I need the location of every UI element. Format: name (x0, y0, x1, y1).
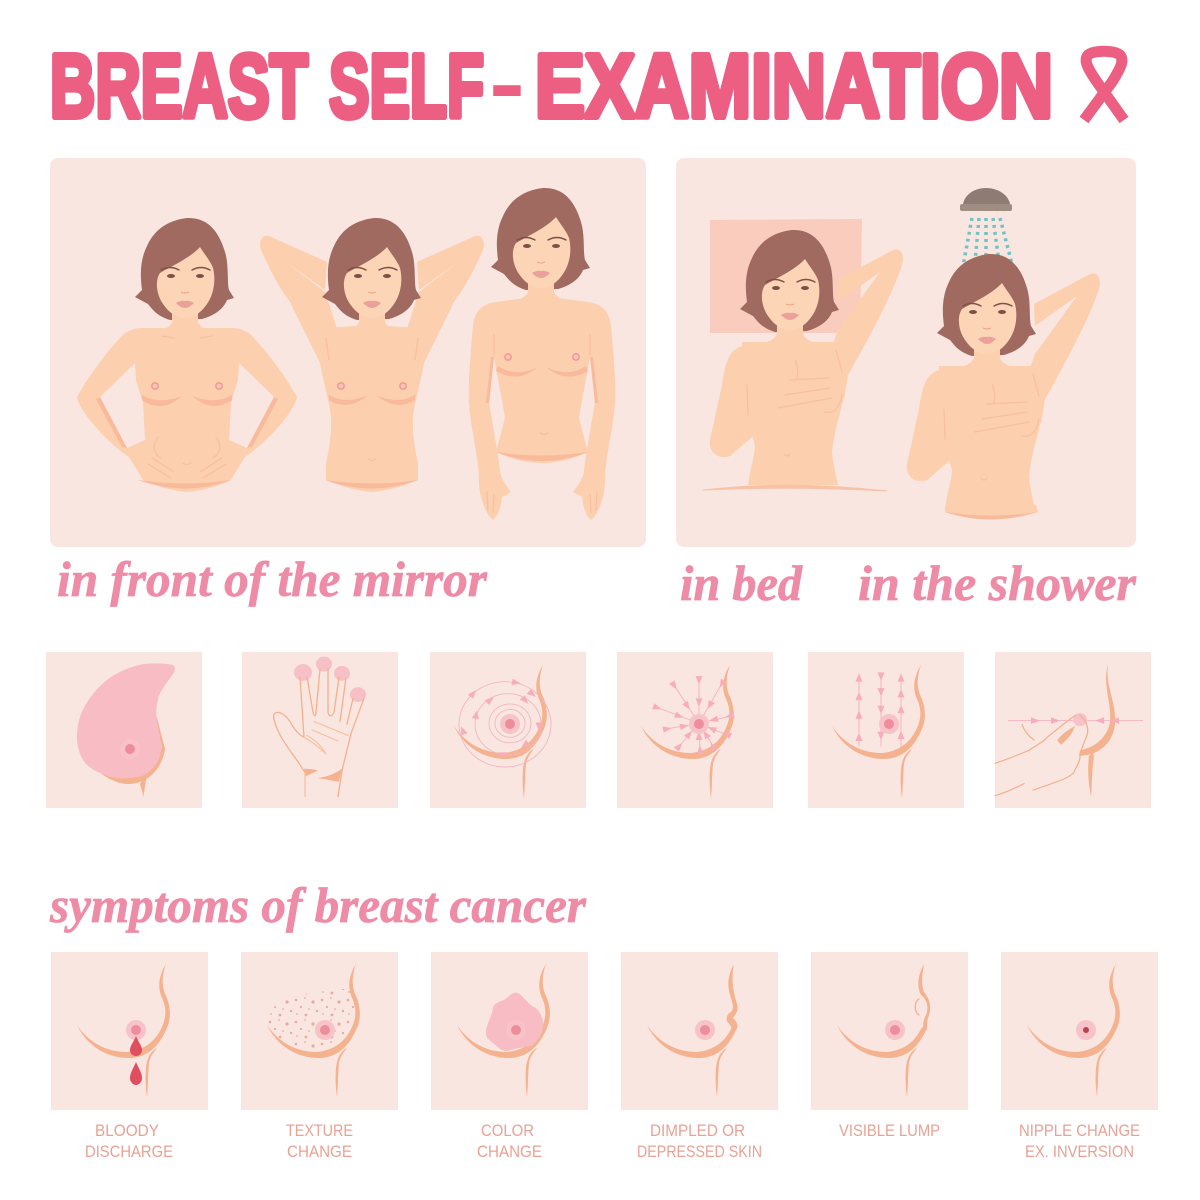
label: dimpled or depressed skin: DEPRESSED SKIN (637, 1142, 762, 1161)
label: bloody discharge: DISCHARGE (85, 1142, 173, 1161)
label: texture change: TEXTURE (286, 1121, 353, 1140)
label: nipple change ex. inversion: EX. INVERSION (1025, 1142, 1134, 1161)
label: color change (477, 1121, 542, 1161)
heading: in bed: in bed (680, 555, 803, 611)
symptom: nipple inversion (1001, 952, 1158, 1110)
figure: hands on hips (77, 218, 297, 492)
label: nipple change ex. inversion (1019, 1121, 1140, 1161)
figure: in bed (710, 230, 903, 485)
figure: arms raised behind head (260, 218, 484, 492)
panel: in front of the mirror (50, 158, 646, 547)
step: circular pattern (430, 652, 586, 808)
panel: in bed and in the shower (676, 158, 1136, 547)
figure: in the shower (907, 254, 1100, 520)
label: visible lump: VISIBLE LUMP (839, 1121, 940, 1140)
heading: symptoms of breast cancer: symptoms of breast cancer (49, 877, 587, 933)
label: dimpled or depressed skin (637, 1121, 762, 1161)
label: color change: COLOR (481, 1121, 534, 1140)
title: SELF (329, 37, 484, 137)
title (50, 34, 1053, 137)
symptom: texture change (241, 952, 398, 1110)
symptom: color change (431, 952, 588, 1110)
label: bloody discharge: BLOODY (95, 1121, 159, 1140)
bed line (703, 485, 887, 491)
step: radial pattern (617, 652, 773, 808)
step: breast area to examine (46, 652, 202, 808)
symptom: visible lump (811, 952, 968, 1110)
icon: shower head (960, 188, 1012, 266)
icon: awareness ribbon (1084, 51, 1124, 120)
heading: in front of the mirror: in front of the mirror (57, 551, 488, 607)
step: fingertips (242, 652, 398, 808)
heading: in the shower: in the shower (858, 555, 1137, 611)
step: squeeze nipple (995, 652, 1151, 808)
label: bloody discharge (85, 1121, 173, 1161)
label: color change: CHANGE (477, 1142, 542, 1161)
label: texture change (286, 1121, 353, 1161)
title: - (489, 34, 525, 134)
label: texture change: CHANGE (287, 1142, 352, 1161)
symptom: dimpled skin (621, 952, 778, 1110)
symptom: bloody discharge (51, 952, 208, 1110)
pillow (710, 219, 862, 333)
title: BREAST (50, 37, 308, 137)
figure: arms down (469, 188, 615, 520)
label: dimpled or depressed skin: DIMPLED OR (650, 1121, 745, 1140)
title: EXAMINATION (535, 37, 1053, 137)
label: nipple change ex. inversion: NIPPLE CHANGE (1019, 1121, 1140, 1140)
step: vertical strip pattern (808, 652, 964, 808)
